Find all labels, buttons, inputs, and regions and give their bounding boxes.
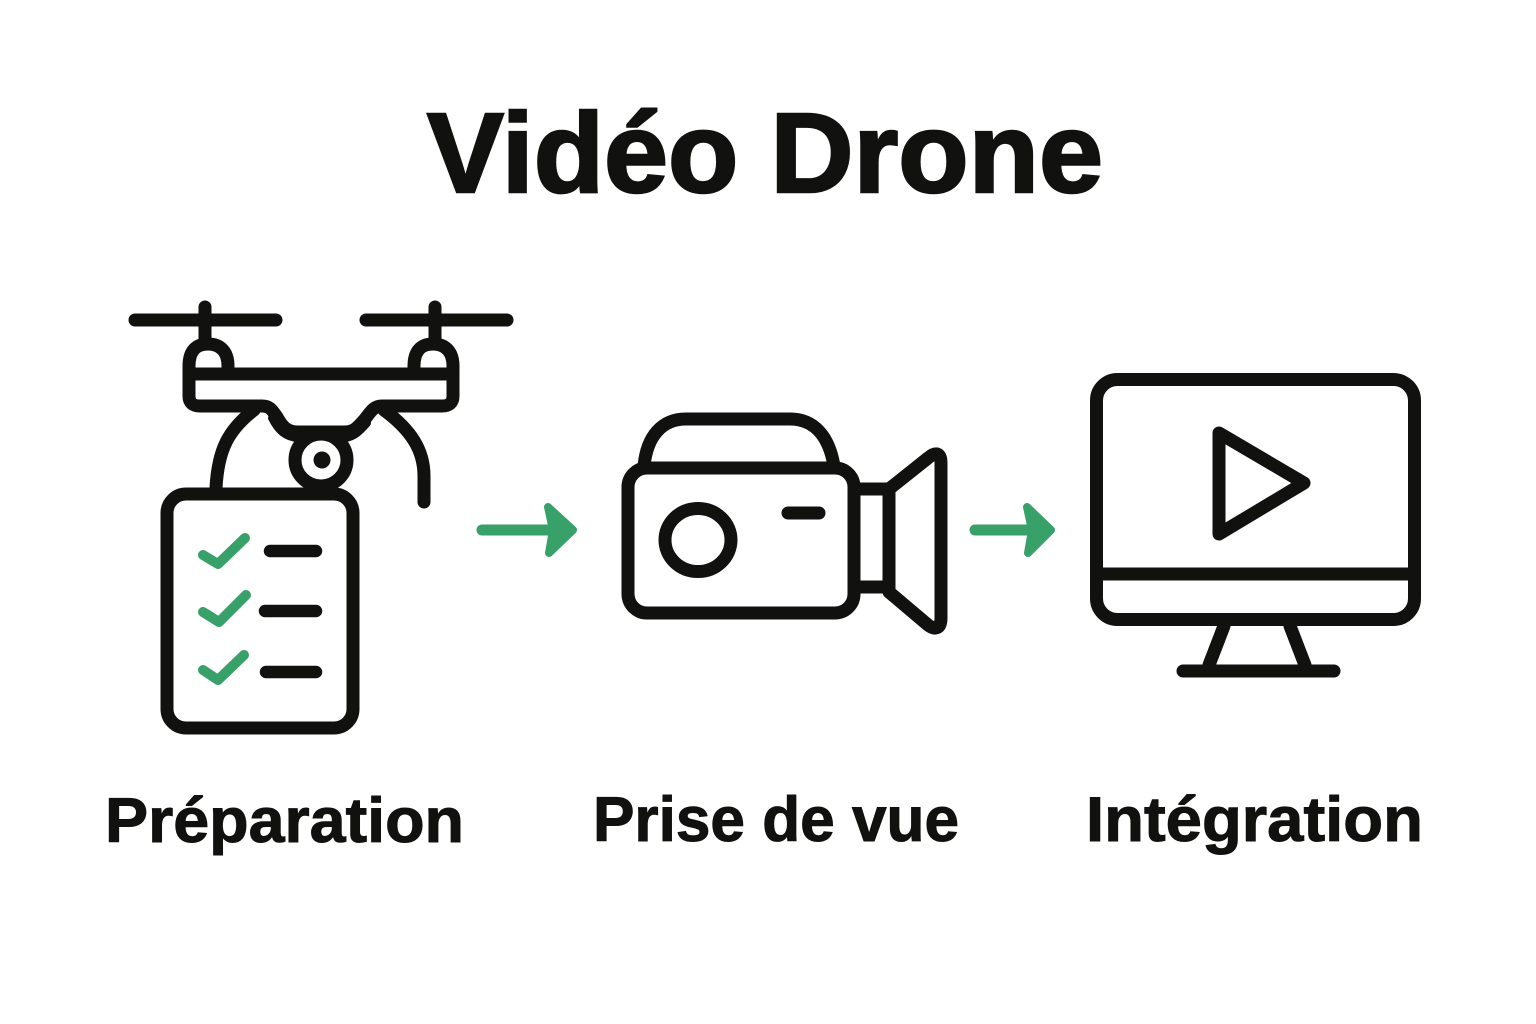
label: prise de vue: Prise de vue [593,785,959,855]
label: intégration: Intégration [1086,785,1423,855]
icon: monitor with play button [1096,380,1414,671]
green check marks [203,538,246,680]
label: préparation: Préparation [105,786,464,856]
title: Vidéo Drone [427,90,1103,216]
icon: drone [135,307,507,502]
icon: video camera [628,419,941,628]
arrow: préparation to prise de vue [482,507,573,553]
panel: prise de vue [593,419,959,855]
arrow: prise de vue to intégration [975,507,1051,553]
panel: intégration [1086,380,1423,855]
checklist lines [265,551,316,672]
panel: préparation [105,307,507,856]
icon: checklist clipboard [167,494,353,728]
